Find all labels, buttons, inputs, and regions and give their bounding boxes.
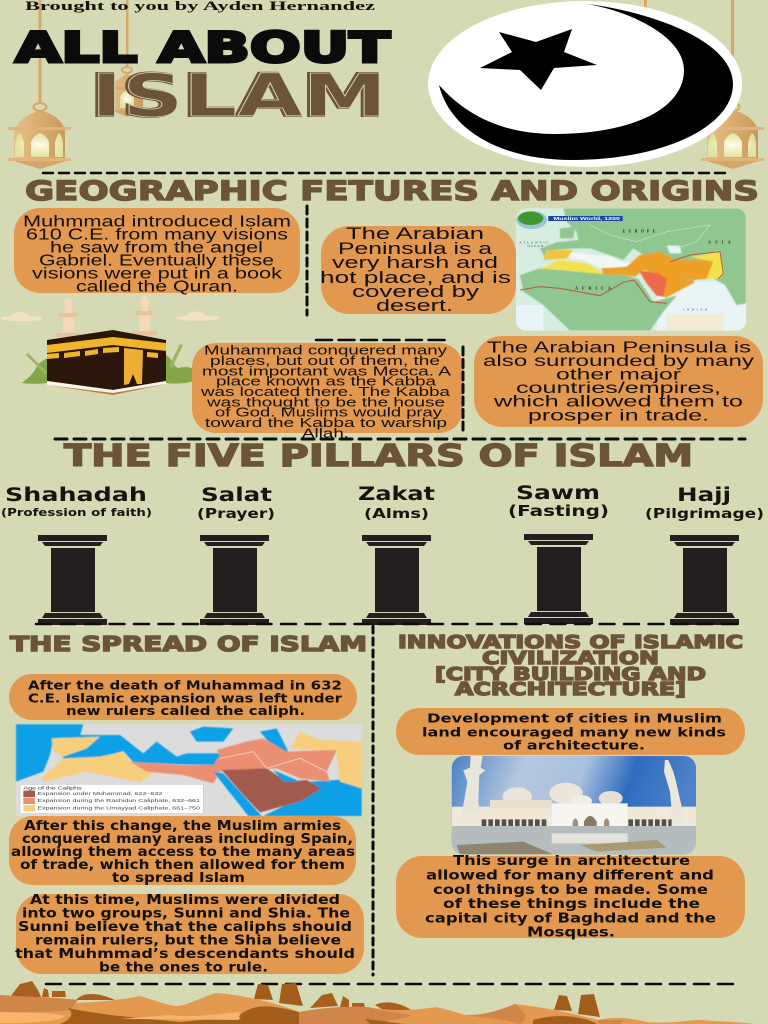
heading: innovations: [CITY BUILDING AND [435,665,706,685]
text box: sunni and shia: be the ones to rule. [99,960,268,976]
map: muslim world: OCEAN [527,244,544,248]
text box: mecca and the kabba: toward the Kabba to warship [205,416,447,430]
pillar: salat: (Prayer) [197,507,275,522]
map: muslim world: Muslim World, 1200 [553,216,621,221]
heading: innovations: CIVILIZATION [482,649,659,669]
text box: arabian peninsula climate: Peninsula is a [338,240,493,258]
text box: arabian peninsula climate: desert. [376,297,453,315]
text box: muhammad introduced islam [14,208,300,296]
text box: muhammad introduced islam: Muhmmad introduced Islam [23,214,291,230]
heading: innovations: ACRCHITECTURE] [455,680,686,700]
pillar: salat: Salat [201,485,272,506]
text box: development of cities: land encouraged many new kinds [422,724,726,740]
text box: arabian peninsula climate [320,225,516,315]
text box: mecca and the kabba: most important was Mecca. A [202,364,452,378]
title: islam [89,61,387,130]
title: islam: ISLAM [89,61,385,130]
image: kaaba [1,295,220,395]
text box: arabian peninsula climate: covered by [352,283,480,301]
text box: death of muhammad: C.E. Islamic expansion was left under [28,690,343,706]
text box: surrounded by empires: prosper in trade. [528,408,709,424]
map: age of the caliphs: Age of the Caliphs [23,785,82,790]
icon: crescent and star [428,1,742,167]
text box: muslim armies: After this change, the Muslim armies [24,819,341,834]
foliage [22,344,202,384]
map: muslim world: ASIA [708,239,731,244]
pillar: zakat: Zakat [358,484,435,505]
heading: innovations: INNOVATIONS OF ISLAMIC [398,633,743,653]
text box: surge in architecture: capital city of Baghdad and the [425,912,716,926]
text box: muslim armies: conquered many areas including Spain, [22,832,353,847]
kaaba walls [47,330,166,390]
map: age of the caliphs [16,724,362,816]
map: muslim world [510,208,746,331]
text box: death of muhammad: new rulers called the caliph. [66,703,305,718]
pillar: hajj: (Pilgrimage) [645,507,764,522]
text box: sunni and shia: remain rulers, but the Shia believe [35,932,341,948]
pillar: shahadah: Shahadah [5,485,147,506]
text box: mecca and the kabba: place known as the Kabba [216,374,436,388]
icon: right hanging lantern [644,0,764,169]
pillar: sawm: (Fasting) [508,502,609,520]
text box: development of cities: of architecture. [503,738,645,752]
text box: death of muhammad: After the death of Muhammad in 632 [28,678,342,692]
text box: surrounded by empires: also surrounded by many [483,353,754,370]
title: islam: ISLAM [91,61,387,130]
heading: geographic features: GEOGRAPHIC FETURES AND ORIGINS [25,176,759,207]
text box: sunni and shia [15,892,364,976]
map: muslim world: ATLANTIC [519,241,549,245]
text box: development of cities [396,708,745,755]
text box: muslim armies: to spread Islam [112,871,245,886]
pillar: salat [197,485,275,625]
text box: muhammad introduced islam: visions were put in a book [32,266,282,282]
text box: death of muhammad [9,674,357,720]
text box: mecca and the kabba: Allah. [302,426,349,440]
text box: mecca and the kabba: of God. Muslims would pray [215,406,443,420]
text box: sunni and shia: At this time, Muslims were divided [30,892,340,908]
text box: surrounded by empires: The Arabian Peninsula is [487,340,751,356]
heading: five pillars: THE FIVE PILLARS OF ISLAM [64,439,693,474]
icon: small lantern behind title [108,0,146,117]
title: all about: ALL ABOUT [15,23,390,72]
text box: surrounded by empires: which allowed them to [492,394,743,410]
text box: arabian peninsula climate: very harsh and [332,254,498,272]
heading: spread of islam: THE SPREAD OF ISLAM [10,632,367,656]
icon: left hanging lantern [8,0,71,169]
cloud right [176,312,220,321]
pillar: shahadah [1,485,152,625]
text box: mecca and the kabba: was located there. The Kabba [199,385,450,399]
text box: surrounded by empires: countries/empires, [516,380,721,397]
pillar: zakat: (Alms) [364,507,429,522]
text box: surge in architecture: of these things include the [443,897,700,912]
illustration: desert dunes [0,981,755,1024]
map: age of the caliphs: Expansion during the Umayyad Caliphate, 661–750 [37,805,201,810]
text box: muslim armies: of trade, which then allowed for them [20,858,345,873]
text box: surrounded by empires: other major [556,366,682,384]
text box: surge in architecture [396,854,745,940]
text box: muhammad introduced islam: 610 C.E. from many visions [26,226,288,244]
text box: surrounded by empires [474,336,763,427]
minaret right [132,295,157,335]
cloud left [1,312,43,321]
text box: muhammad introduced islam: he saw from the angel [50,240,263,256]
map: muslim world: INDIAN [683,307,708,311]
map: age of the caliphs: Expansion under Muhammad, 622–632 [37,791,163,796]
text box: muhammad introduced islam: Gabriel. Eventually these [39,252,274,270]
text box: muslim armies [9,816,356,886]
text box: development of cities: Development of cities in Muslim [427,710,722,726]
pillar: shahadah: (Profession of faith) [1,506,152,519]
pillar: zakat [358,484,435,625]
text box: mecca and the kabba [192,343,463,440]
text box: surge in architecture: cool things to be made. Some [433,883,708,898]
text box: muhammad introduced islam: called the Quran. [76,278,238,296]
pillar: sawm [508,483,609,624]
map: muslim world: EUROPE [623,229,656,234]
pillar: sawm: Sawm [516,483,600,504]
image: white mosque [452,756,696,854]
text box: sunni and shia: that Muhmmad’s descendants should [15,946,355,962]
minaret left [56,297,80,337]
text box: surge in architecture: allowed for many different and [426,868,714,884]
text box: mecca and the kabba: Muhammad conquered many [204,344,448,358]
text box: mecca and the kabba: was thought to be the house [205,396,445,410]
text box: arabian peninsula climate: The Arabian [346,225,484,243]
text box: surge in architecture: This surge in architecture [453,854,690,869]
text box: sunni and shia: into two groups, Sunni and Shia. The [22,906,350,922]
text box: arabian peninsula climate: hot place, and is [320,269,511,287]
text box: surge in architecture: Mosques. [527,926,615,940]
map: age of the caliphs: Expansion during the Rashidun Caliphate, 632–661 [37,798,201,803]
text box: muslim armies: allowing them access to the many areas [11,845,355,860]
text box: mecca and the kabba: places, but out of them, the [210,354,440,368]
pillar: hajj: Hajj [677,485,731,506]
map: muslim world: AFRICA [575,286,612,291]
text box: sunni and shia: Sunni believe that the caliphs should [18,919,352,935]
heading: innovations [398,633,743,700]
pillar: hajj [645,485,764,625]
